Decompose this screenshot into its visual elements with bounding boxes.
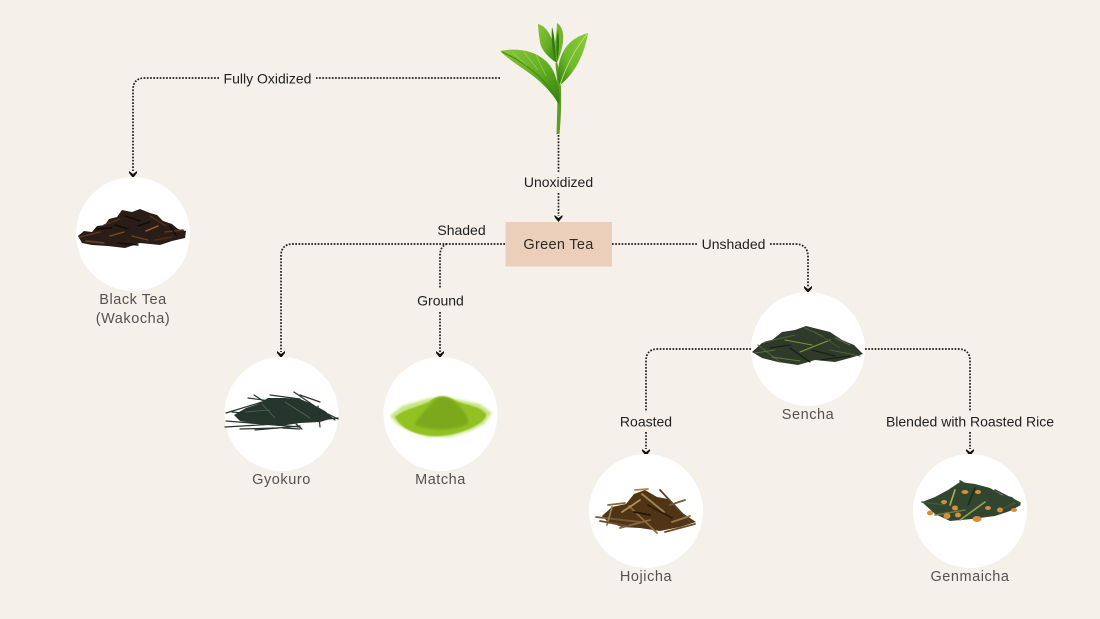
arrow: fully oxidized connector xyxy=(129,78,500,178)
tea: gyokuro xyxy=(224,357,338,471)
tea: genmaicha xyxy=(913,454,1027,568)
label: Unoxidized: Unoxidized xyxy=(524,174,593,190)
tea: matcha xyxy=(384,357,498,471)
label: Fully Oxidized: Fully Oxidized xyxy=(224,70,311,86)
box: Green Tea: Green Tea xyxy=(523,237,594,253)
label: Roasted: Roasted xyxy=(620,414,672,430)
label: Black Tea (Wakocha) xyxy=(96,292,170,327)
label: Blended with Roasted Rice: Blended with Roasted Rice xyxy=(886,414,1054,430)
label: Unshaded: Unshaded xyxy=(702,236,765,252)
label: Shaded: Shaded xyxy=(437,222,486,238)
label: Genmaicha: Genmaicha xyxy=(930,569,1010,585)
icon: tea leaf sprig xyxy=(500,23,588,134)
label: Ground: Ground xyxy=(417,292,464,308)
label: Hojicha: Hojicha xyxy=(620,569,672,585)
label: Black Tea (Wakocha): Black Tea xyxy=(99,292,167,308)
label: Black Tea (Wakocha): (Wakocha) xyxy=(96,311,170,327)
arrow: shaded connector to gyokuro xyxy=(277,244,505,358)
label: Gyokuro: Gyokuro xyxy=(252,472,311,488)
arrow: ground connector to matcha xyxy=(436,244,447,358)
arrow: blended connector to genmaicha xyxy=(865,349,974,456)
arrow: unoxidized connector xyxy=(554,135,562,222)
arrow: roasted connector to hojicha xyxy=(642,349,751,456)
tea: hojicha xyxy=(589,454,703,568)
box: Green Tea xyxy=(506,222,612,266)
label: Matcha: Matcha xyxy=(415,472,466,488)
tea: sencha xyxy=(751,292,865,406)
label: Sencha: Sencha xyxy=(782,407,835,423)
arrow: unshaded connector to sencha xyxy=(612,244,812,293)
tea: black tea xyxy=(76,177,190,291)
